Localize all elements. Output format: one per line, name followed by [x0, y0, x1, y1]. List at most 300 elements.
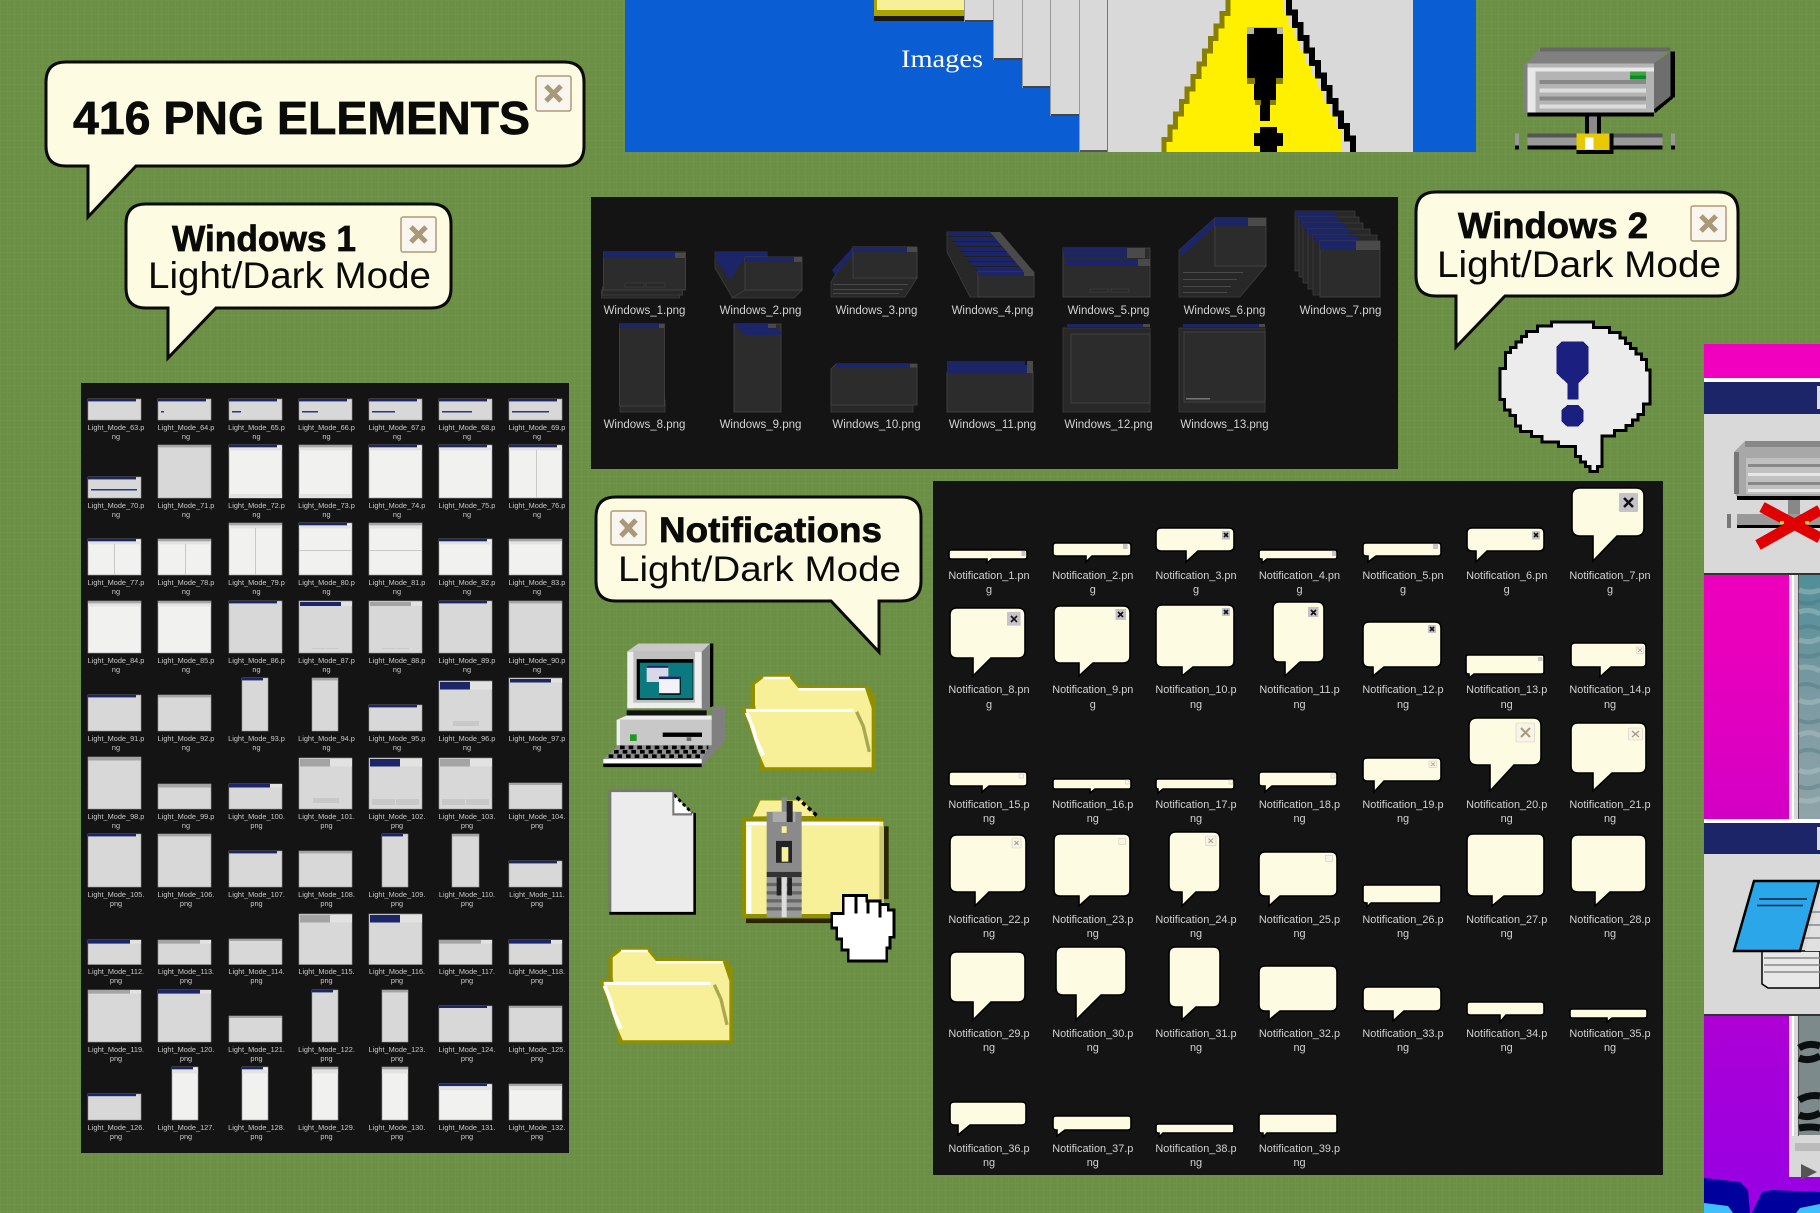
thumbnail: Light_Mode_86: ng	[252, 665, 261, 674]
thumbnail: Notification_22: ng	[983, 928, 995, 940]
thumbnail: Light_Mode_117: Light_Mode_117.	[439, 967, 495, 976]
thumbnail: Windows_9: Windows_9.png	[720, 419, 801, 431]
thumbnail: Light_Mode_96	[439, 681, 495, 752]
thumbnail: Light_Mode_77: ng	[112, 587, 120, 596]
thumbnail: Light_Mode_118	[509, 940, 565, 985]
thumbnail: Light_Mode_101	[298, 758, 355, 830]
thumbnail: Windows_6: Windows_6.png	[1184, 305, 1265, 317]
thumbnail: Light_Mode_72	[228, 445, 285, 519]
thumbnail: Notification_33: Notification_33.p	[1362, 1028, 1444, 1040]
thumbnail: Notification_24: Notification_24.p	[1155, 914, 1237, 926]
magenta and purple gradient backdrop	[1704, 344, 1820, 1213]
thumbnail: Light_Mode_109: png	[391, 899, 403, 908]
thumbnail: Notification_37: Notification_37.p	[1052, 1143, 1133, 1155]
thumbnail: Light_Mode_131: Light_Mode_131.	[439, 1123, 495, 1132]
icon: blue notepad	[1734, 881, 1820, 988]
thumbnail: Light_Mode_95: Light_Mode_95.p	[369, 734, 425, 743]
thumbnail: Notification_6: Notification_6.pn	[1466, 570, 1547, 582]
thumbnail: Light_Mode_97: ng	[533, 743, 541, 752]
icon: close button	[611, 511, 646, 545]
seascape strip 2 with scrollbar	[1789, 1016, 1820, 1180]
thumbnail: Light_Mode_99	[158, 784, 214, 830]
icon: open yellow folder small	[599, 947, 733, 1044]
thumbnail: Notification_30	[1052, 947, 1133, 1054]
thumbnail: Light_Mode_124	[439, 1006, 495, 1063]
thumbnail: Notification_30: ng	[1087, 1042, 1099, 1054]
icon: network server	[1515, 48, 1675, 154]
thumbnail: Light_Mode_100: Light_Mode_100.	[228, 812, 285, 821]
thumbnail: Notification_3: Notification_3.pn	[1155, 570, 1237, 582]
thumbnail: Notification_17	[1155, 779, 1237, 825]
thumbnail: Notification_17: Notification_17.p	[1155, 799, 1237, 811]
heading text: Windows 2	[1458, 205, 1648, 246]
thumbnail: Light_Mode_68	[439, 399, 495, 441]
thumbnail: Light_Mode_99: ng	[182, 821, 190, 830]
thumbnail: Light_Mode_73	[298, 445, 355, 519]
thumbnail: Light_Mode_117	[439, 940, 495, 985]
thumbnail: Light_Mode_122: png	[320, 1054, 333, 1063]
thumbnail: Light_Mode_114	[228, 939, 285, 985]
thumbnail: Light_Mode_65	[228, 399, 285, 441]
thumbnail: Windows_2: Windows_2.png	[720, 305, 801, 317]
thumbnail: Notification_28: Notification_28.p	[1569, 914, 1651, 926]
thumbnail: Notification_30: Notification_30.p	[1052, 1028, 1133, 1040]
thumbnail: Notification_2	[1052, 543, 1133, 596]
thumbnail: Notification_11	[1259, 602, 1340, 711]
thumbnail: Windows_1	[602, 252, 686, 317]
thumbnail: Light_Mode_77	[88, 539, 144, 596]
subheading text: Light/Dark Mode	[148, 255, 431, 296]
thumbnail: Light_Mode_79	[228, 523, 285, 596]
thumbnail: Light_Mode_92: ng	[182, 743, 190, 752]
thumbnail: Notification_18: Notification_18.p	[1259, 799, 1340, 811]
thumbnail: Light_Mode_86: Light_Mode_86.p	[228, 656, 285, 665]
thumbnail: Notification_13: Notification_13.p	[1466, 684, 1547, 696]
thumbnail: Notification_4	[1259, 550, 1340, 596]
thumbnail: Windows_4	[947, 232, 1034, 317]
thumbnail: Light_Mode_117: png	[461, 976, 473, 985]
icon: close button	[1691, 206, 1726, 241]
thumbnail: Light_Mode_73: ng	[322, 510, 331, 519]
thumbnail: Notification_32: Notification_32.p	[1259, 1028, 1340, 1040]
thumbnail: Light_Mode_128	[228, 1067, 285, 1141]
thumbnail: Windows_5	[1063, 248, 1150, 317]
thumbnail: Notification_39: ng	[1293, 1157, 1306, 1169]
thumbnail: Light_Mode_86	[228, 601, 285, 674]
thumbnail: Light_Mode_88: ng	[393, 665, 401, 674]
thumbnail: Light_Mode_85: ng	[182, 665, 190, 674]
icon: retro desktop computer	[603, 643, 725, 767]
thumbnail: Notification_31	[1155, 947, 1237, 1054]
thumbnail: Light_Mode_129: Light_Mode_129.	[298, 1123, 355, 1132]
thumbnail: Light_Mode_102: Light_Mode_102.	[369, 812, 425, 821]
thumbnail: Windows_13: Windows_13.png	[1180, 419, 1269, 431]
thumbnail: Light_Mode_108	[298, 851, 355, 908]
thumbnail: Light_Mode_100: png	[250, 821, 263, 830]
thumbnail: Light_Mode_94: Light_Mode_94.p	[298, 734, 355, 743]
heading text: 416 PNG ELEMENTS	[73, 92, 530, 144]
thumbnail: Light_Mode_93: Light_Mode_93.p	[228, 734, 285, 743]
thumbnail: Light_Mode_110	[439, 834, 495, 908]
thumbnail: Light_Mode_104: Light_Mode_104.	[509, 812, 565, 821]
thumbnail: Notification_27	[1466, 834, 1547, 940]
thumbnail: Light_Mode_70	[88, 477, 144, 519]
thumbnail: Light_Mode_96: Light_Mode_96.p	[439, 734, 495, 743]
thumbnail: Light_Mode_106: png	[180, 899, 192, 908]
thumbnail: Light_Mode_91: Light_Mode_91.p	[88, 734, 144, 743]
thumbnail: Notification_33: ng	[1397, 1042, 1409, 1054]
thumbnail: Light_Mode_130	[369, 1067, 425, 1141]
thumbnail: Light_Mode_105: png	[110, 899, 122, 908]
thumbnail: Windows_12	[1063, 324, 1153, 431]
thumbnail: Light_Mode_63	[88, 399, 144, 441]
thumbnail: Notification_7: Notification_7.pn	[1569, 570, 1651, 582]
thumbnail: Notification_10	[1155, 605, 1237, 711]
thumbnail: Light_Mode_65: ng	[252, 432, 261, 441]
thumbnail: Light_Mode_75	[439, 445, 495, 519]
thumbnail: Notification_10: Notification_10.p	[1155, 684, 1237, 696]
thumbnail: Light_Mode_92: Light_Mode_92.p	[158, 734, 214, 743]
thumbnail: Notification_32	[1259, 966, 1340, 1054]
thumbnail: Notification_13	[1466, 655, 1547, 711]
thumbnail: Light_Mode_65: Light_Mode_65.p	[228, 423, 285, 432]
thumbnail: Light_Mode_113	[158, 940, 214, 985]
thumbnail: Light_Mode_71: ng	[182, 510, 190, 519]
thumbnail: Light_Mode_106	[158, 834, 214, 908]
thumbnail: Light_Mode_123	[369, 990, 425, 1063]
thumbnail: Notification_15: Notification_15.p	[948, 799, 1030, 811]
thumbnail: Light_Mode_76: ng	[533, 510, 541, 519]
thumbnail: Windows_4: Windows_4.png	[952, 305, 1033, 317]
thumbnail: Light_Mode_111: png	[531, 899, 543, 908]
thumbnail: Notification_25	[1259, 852, 1340, 940]
thumbnail: Light_Mode_89	[439, 601, 495, 674]
thumbnail: Light_Mode_131	[439, 1084, 495, 1141]
thumbnail: Light_Mode_116: Light_Mode_116.	[369, 967, 425, 976]
thumbnail: Notification_11: ng	[1293, 699, 1306, 711]
thumbnail: Light_Mode_131: png	[461, 1132, 473, 1141]
thumbnail: Light_Mode_124: Light_Mode_124.	[439, 1045, 495, 1054]
thumbnail: Light_Mode_123: png	[391, 1054, 403, 1063]
thumbnail: Notification_5: g	[1400, 584, 1406, 596]
thumbnail: Windows_8: Windows_8.png	[604, 419, 685, 431]
thumbnail: Light_Mode_103: Light_Mode_103.	[439, 812, 495, 821]
thumbnail: Notification_25: ng	[1293, 928, 1306, 940]
bubble shape	[126, 204, 451, 358]
thumbnail: Light_Mode_121	[228, 1016, 285, 1063]
stacked grey windows	[964, 0, 1413, 152]
thumbnail: Windows_5: Windows_5.png	[1068, 305, 1149, 317]
thumbnail: Notification_4: g	[1296, 584, 1303, 596]
thumbnail: Notification_33	[1362, 987, 1444, 1054]
thumbnail: Light_Mode_91	[88, 695, 144, 752]
thumbnail: Light_Mode_74	[369, 445, 425, 519]
thumbnail: Notification_37: ng	[1087, 1157, 1099, 1169]
bubble shape	[1416, 192, 1738, 347]
callout: Notifications	[596, 497, 921, 652]
thumbnail: Notification_23	[1052, 834, 1133, 940]
thumbnail: Light_Mode_128: png	[250, 1132, 263, 1141]
caption: Images: Images	[901, 46, 983, 73]
thumbnail: Notification_38: ng	[1190, 1157, 1202, 1169]
thumbnail: Notification_22	[948, 835, 1030, 940]
thumbnail: Notification_34	[1466, 1002, 1547, 1054]
thumbnail: Light_Mode_89: Light_Mode_89.p	[439, 656, 495, 665]
thumbnail: Light_Mode_69: ng	[533, 432, 541, 441]
thumbnail: Light_Mode_128: Light_Mode_128.	[228, 1123, 285, 1132]
thumbnail: Notification_18	[1259, 772, 1340, 825]
thumbnail: Light_Mode_97: Light_Mode_97.p	[509, 734, 565, 743]
thumbnail: Light_Mode_118: Light_Mode_118.	[509, 967, 565, 976]
thumbnail: Light_Mode_64: Light_Mode_64.p	[158, 423, 214, 432]
thumbnail: Notification_25: Notification_25.p	[1259, 914, 1340, 926]
thumbnail: Light_Mode_80	[298, 523, 355, 596]
thumbnail: Light_Mode_96: ng	[463, 743, 471, 752]
thumbnail: Windows_13	[1179, 324, 1269, 431]
thumbnail: Light_Mode_107: Light_Mode_107.	[228, 890, 285, 899]
thumbnail: Light_Mode_125: png	[531, 1054, 543, 1063]
thumbnail: Light_Mode_122	[298, 990, 355, 1063]
thumbnail: Windows_6	[1179, 218, 1266, 317]
thumbnail: Light_Mode_100	[228, 784, 285, 830]
thumbnail: Light_Mode_126: Light_Mode_126.	[88, 1123, 144, 1132]
thumbnail: Notification_15	[948, 772, 1030, 825]
thumbnail: Light_Mode_119: png	[110, 1054, 122, 1063]
thumbnail: Notification_2: Notification_2.pn	[1052, 570, 1133, 582]
thumbnail: Notification_5	[1362, 543, 1444, 596]
thumbnail: Light_Mode_67: Light_Mode_67.p	[369, 423, 425, 432]
thumbnail: Light_Mode_76: Light_Mode_76.p	[509, 501, 565, 510]
bubble shape	[46, 62, 584, 217]
thumbnail: Light_Mode_132: Light_Mode_132.	[509, 1123, 565, 1132]
thumbnail: Light_Mode_113: png	[180, 976, 192, 985]
thumbnail: Notification_4: Notification_4.pn	[1259, 570, 1340, 582]
thumbnail: Notification_12: ng	[1397, 699, 1409, 711]
thumbnail: Notification_1: Notification_1.pn	[948, 570, 1030, 582]
bottom dark blue shapes	[1704, 1178, 1820, 1213]
thumbnail: Notification_35	[1569, 1009, 1651, 1054]
callout: 416 PNG ELEMENTS	[46, 62, 584, 217]
thumbnail: Notification_35: ng	[1604, 1042, 1616, 1054]
thumbnail: Light_Mode_121: png	[250, 1054, 263, 1063]
thumbnail: Notification_11: Notification_11.p	[1259, 684, 1340, 696]
thumbnail: Windows_9	[720, 324, 801, 431]
thumbnail: Light_Mode_70: ng	[112, 510, 120, 519]
thumbnail: Light_Mode_79: Light_Mode_79.p	[228, 578, 285, 587]
thumbnail: Light_Mode_63: ng	[112, 432, 120, 441]
thumbnail: Windows_10: Windows_10.png	[832, 419, 921, 431]
thumbnail: Notification_15: ng	[983, 813, 995, 825]
thumbnail: Windows_12: Windows_12.png	[1064, 419, 1153, 431]
thumbnail: Light_Mode_64	[158, 399, 214, 441]
thumbnail: Light_Mode_71: Light_Mode_71.p	[158, 501, 214, 510]
thumbnail: Light_Mode_89: ng	[463, 665, 471, 674]
thumbnail: Light_Mode_94: ng	[322, 743, 331, 752]
panel background	[81, 383, 569, 1153]
thumbnail: Light_Mode_120: png	[180, 1054, 192, 1063]
thumbnail: Windows_8	[604, 324, 685, 431]
thumbnail: Light_Mode_78: ng	[182, 587, 190, 596]
thumbnail: Light_Mode_123: Light_Mode_123.	[369, 1045, 425, 1054]
thumbnail: Light_Mode_111	[509, 861, 565, 908]
thumbnail: Light_Mode_120	[158, 990, 214, 1063]
thumbnail: Light_Mode_107: png	[250, 899, 263, 908]
thumbnail: Notification_38	[1155, 1124, 1237, 1169]
thumbnail: Notification_19: Notification_19.p	[1362, 799, 1444, 811]
thumbnail: Notification_20: ng	[1501, 813, 1513, 825]
thumbnail: Light_Mode_95	[369, 705, 425, 752]
thumbnail: Light_Mode_80: ng	[322, 587, 331, 596]
seascape strip 1	[1789, 575, 1820, 820]
thumbnail: Light_Mode_85: Light_Mode_85.p	[158, 656, 214, 665]
thumbnail: Light_Mode_69: Light_Mode_69.p	[509, 423, 565, 432]
thumbnail: Light_Mode_104	[509, 783, 565, 830]
thumbnail: Light_Mode_81	[369, 523, 425, 596]
thumbnail: Notification_23: ng	[1087, 928, 1099, 940]
dialog window 2	[1704, 819, 1820, 1016]
thumbnail: Notification_8	[948, 608, 1030, 711]
thumbnail: Light_Mode_85	[158, 601, 214, 674]
thumbnail: Light_Mode_110: Light_Mode_110.	[439, 890, 495, 899]
thumbnail: Notification_2: g	[1090, 584, 1096, 596]
thumbnail: Light_Mode_93: ng	[252, 743, 261, 752]
thumbnail: Light_Mode_90: ng	[533, 665, 541, 674]
thumbnail: Light_Mode_102	[369, 758, 425, 830]
thumbnail: Light_Mode_112: Light_Mode_112.	[88, 967, 144, 976]
thumbnail: Notification_37	[1052, 1116, 1133, 1169]
thumbnail: Light_Mode_66: Light_Mode_66.p	[298, 423, 355, 432]
thumbnail: Light_Mode_66: ng	[322, 432, 331, 441]
thumbnail: Light_Mode_67	[369, 399, 425, 441]
thumbnail: Light_Mode_126	[88, 1094, 144, 1141]
thumbnail: Notification_29	[948, 952, 1030, 1054]
thumbnail: Notification_19	[1362, 758, 1444, 825]
thumbnail: Light_Mode_109: Light_Mode_109.	[369, 890, 425, 899]
thumbnail: Notification_1	[948, 550, 1030, 596]
thumbnail: Light_Mode_80: Light_Mode_80.p	[298, 578, 355, 587]
icon: disconnected network server	[1727, 441, 1820, 545]
thumbnail: Light_Mode_93	[228, 678, 285, 752]
thumbnail: Light_Mode_112: png	[110, 976, 122, 985]
panel background	[933, 481, 1663, 1175]
thumbnail: Light_Mode_108: Light_Mode_108.	[298, 890, 355, 899]
subheading text: Light/Dark Mode	[618, 550, 901, 589]
thumbnail: Windows_11	[947, 361, 1036, 431]
thumbnail: Notification_19: ng	[1397, 813, 1409, 825]
thumbnail: Notification_36	[948, 1102, 1030, 1169]
thumbnail: Notification_9: Notification_9.pn	[1052, 684, 1133, 696]
thumbnail: Notification_8: g	[986, 699, 992, 711]
thumbnail: Notification_7: g	[1607, 584, 1613, 596]
thumbnail: Notification_29: ng	[983, 1042, 995, 1054]
thumbnail: Notification_23: Notification_23.p	[1052, 914, 1133, 926]
thumbnail: Notification_21	[1569, 723, 1651, 825]
thumbnail: Light_Mode_72: ng	[252, 510, 261, 519]
thumbnail: Light_Mode_64: ng	[182, 432, 190, 441]
thumbnail: Notification_3	[1155, 528, 1237, 596]
thumbnail: Notification_14: ng	[1604, 699, 1616, 711]
thumbnail: Light_Mode_87: Light_Mode_87.p	[298, 656, 355, 665]
dialog window 1	[1704, 378, 1820, 575]
thumbnail: Light_Mode_129: png	[320, 1132, 333, 1141]
thumbnail: Light_Mode_105	[88, 834, 144, 908]
thumbnail: Notification_32: ng	[1293, 1042, 1306, 1054]
thumbnail: Notification_31: ng	[1190, 1042, 1202, 1054]
icon: zipped folder	[742, 797, 889, 923]
thumbnail: Light_Mode_76	[509, 445, 565, 519]
thumbnail: Notification_24	[1155, 832, 1237, 940]
thumbnail: Notification_13: ng	[1501, 699, 1513, 711]
thumbnail: Light_Mode_101: png	[320, 821, 333, 830]
thumbnail: Light_Mode_84: Light_Mode_84.p	[88, 656, 144, 665]
thumbnail: Light_Mode_120: Light_Mode_120.	[158, 1045, 214, 1054]
thumbnail: Windows_3	[831, 247, 917, 317]
thumbnail: Notification_12: Notification_12.p	[1362, 684, 1444, 696]
thumbnail: Light_Mode_66	[298, 399, 355, 441]
thumbnail: Notification_16: Notification_16.p	[1052, 799, 1133, 811]
thumbnail: Light_Mode_116	[369, 914, 425, 985]
thumbnail: Light_Mode_130: Light_Mode_130.	[369, 1123, 425, 1132]
thumbnail: Light_Mode_74: Light_Mode_74.p	[369, 501, 425, 510]
thumbnail: Light_Mode_91: ng	[112, 743, 120, 752]
thumbnail: Light_Mode_82: ng	[463, 587, 471, 596]
thumbnail: Light_Mode_125: Light_Mode_125.	[509, 1045, 565, 1054]
thumbnail: Notification_9: g	[1090, 699, 1096, 711]
thumbnail: Notification_26: ng	[1397, 928, 1409, 940]
thumbnail: Notification_29: Notification_29.p	[948, 1028, 1030, 1040]
thumbnail: Light_Mode_63: Light_Mode_63.p	[88, 423, 144, 432]
callout: Windows 1	[126, 204, 451, 358]
thumbnail: Light_Mode_121: Light_Mode_121.	[228, 1045, 285, 1054]
thumbnail: Notification_18: ng	[1293, 813, 1306, 825]
bubble shape	[596, 497, 921, 652]
thumbnail: Notification_31: Notification_31.p	[1155, 1028, 1237, 1040]
thumbnail: Light_Mode_122: Light_Mode_122.	[298, 1045, 355, 1054]
thumbnail: Light_Mode_88: Light_Mode_88.p	[369, 656, 425, 665]
thumbnail: Light_Mode_87: ng	[322, 665, 331, 674]
thumbnail: Light_Mode_81: ng	[393, 587, 401, 596]
thumbnail: Notification_28: ng	[1604, 928, 1616, 940]
thumbnail: Light_Mode_68: Light_Mode_68.p	[439, 423, 495, 432]
icon: warning triangle	[1164, 0, 1353, 152]
thumbnail: Light_Mode_106: Light_Mode_106.	[158, 890, 214, 899]
icon: yellow folder remnant	[874, 0, 964, 21]
thumbnail: Light_Mode_95: ng	[393, 743, 401, 752]
thumbnail: Light_Mode_114: png	[250, 976, 263, 985]
thumbnail: Light_Mode_82: Light_Mode_82.p	[439, 578, 495, 587]
thumbnail: Light_Mode_70: Light_Mode_70.p	[88, 501, 144, 510]
thumbnail: Notification_27: ng	[1501, 928, 1513, 940]
icon: exclamation speech bubble	[1500, 322, 1650, 471]
thumbnail: Notification_14	[1569, 643, 1651, 711]
thumbnail: Notification_17: ng	[1190, 813, 1202, 825]
thumbnail: Light_Mode_132	[509, 1084, 565, 1141]
thumbnail: Light_Mode_67: ng	[393, 432, 401, 441]
thumbnail: Notification_6: g	[1504, 584, 1510, 596]
thumbnail: Windows_2	[715, 252, 802, 317]
thumbnail: Light_Mode_124: png	[461, 1054, 473, 1063]
thumbnail: Notification_20	[1466, 718, 1547, 825]
thumbnail: Notification_27: Notification_27.p	[1466, 914, 1547, 926]
thumbnail: Light_Mode_92	[158, 695, 214, 752]
thumbnail: Notification_6	[1466, 528, 1547, 596]
thumbnail: Light_Mode_78	[158, 539, 214, 596]
thumbnail: Light_Mode_105: Light_Mode_105.	[88, 890, 144, 899]
thumbnail: Light_Mode_94	[298, 678, 355, 752]
thumbnail: Windows_7: Windows_7.png	[1300, 305, 1381, 317]
thumbnail: Light_Mode_109	[369, 834, 425, 908]
thumbnail: Notification_26	[1362, 885, 1444, 940]
